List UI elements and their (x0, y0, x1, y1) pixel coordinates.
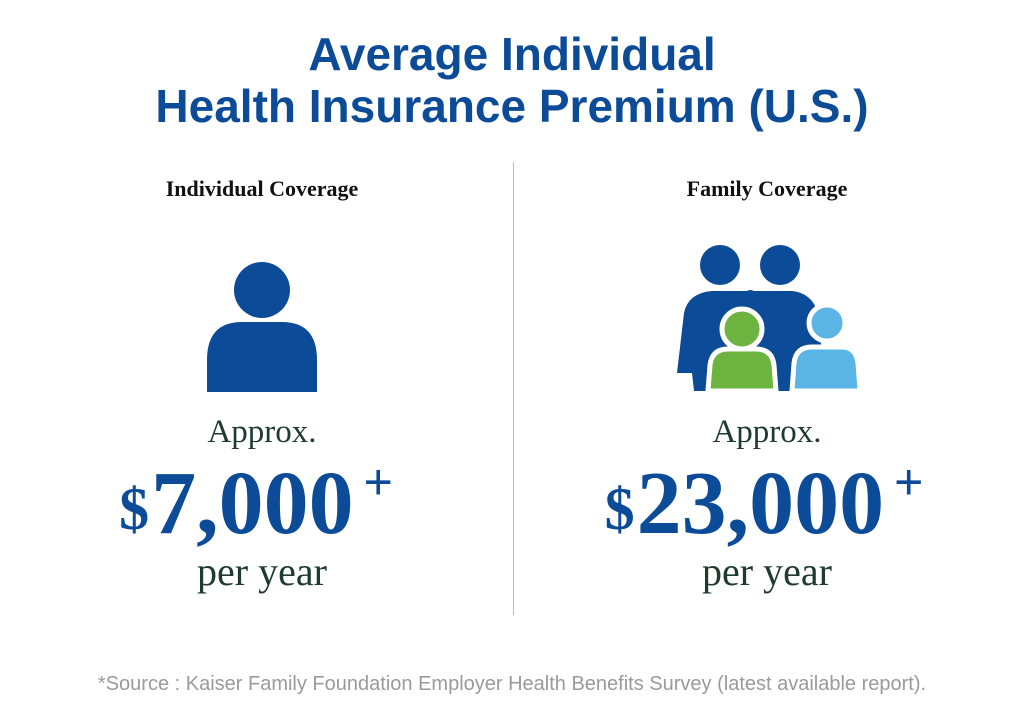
divider (513, 162, 514, 615)
panel: individual (119, 176, 393, 594)
heading: family coverage: Family Coverage (687, 176, 847, 201)
icon: family (677, 245, 858, 391)
number: 23,000: $23,000+ (605, 454, 923, 553)
title: Average Individual (308, 28, 716, 80)
text: approx: Approx. (712, 414, 822, 450)
title: Health Insurance Premium (U.S.) (155, 80, 869, 132)
icon: person (207, 262, 317, 392)
heading: individual coverage: Individual Coverage (166, 176, 358, 201)
source note: *Source : Kaiser Family Foundation Employer Health Benefits Survey (latest available report). (98, 673, 926, 695)
number: 7,000: $7,000+ (119, 454, 393, 553)
text: approx: Approx. (207, 414, 317, 450)
panel: family (605, 176, 923, 594)
text: per year: per year (197, 549, 327, 594)
title (155, 28, 869, 132)
text: per year: per year (702, 549, 832, 594)
